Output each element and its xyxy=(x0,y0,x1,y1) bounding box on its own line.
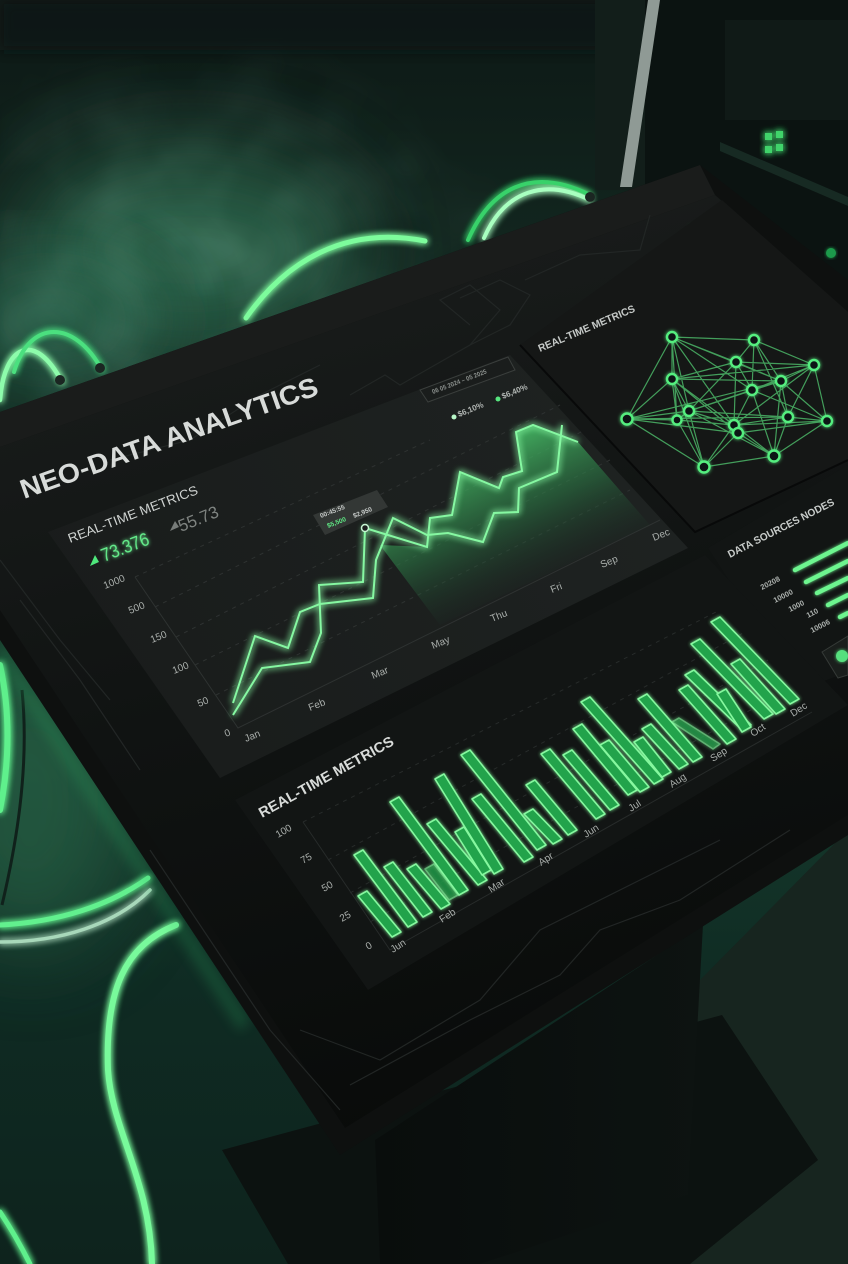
circuit traces xyxy=(0,215,790,1110)
x axis labels: Apr xyxy=(537,850,556,869)
bar labels: 10006 xyxy=(809,617,831,635)
server rack, top right xyxy=(595,0,848,300)
y axis labels: 75 xyxy=(299,851,315,867)
bar chart title: REAL-TIME METRICS xyxy=(256,734,397,821)
chart grid xyxy=(135,405,660,728)
tooltip: 00:45:55 xyxy=(319,504,346,520)
network title: REAL-TIME METRICS xyxy=(536,303,637,355)
line chart title: REAL-TIME METRICS xyxy=(66,482,200,546)
x axis labels xyxy=(243,527,672,745)
metric: 55.73: 55.73 xyxy=(175,502,221,536)
neon cables xyxy=(0,182,590,1264)
device body xyxy=(0,165,848,1155)
status widget xyxy=(822,636,848,678)
y axis labels: 0 xyxy=(223,727,233,740)
status light xyxy=(826,248,836,258)
metric: 73.376: 73.376 xyxy=(98,529,152,566)
cable: top right pair xyxy=(468,182,590,240)
data sources title: DATA SOURCES NODES xyxy=(726,496,837,561)
bar labels: 10000 xyxy=(772,587,794,605)
x axis labels: Sep xyxy=(709,745,730,765)
x axis labels xyxy=(389,701,810,956)
y axis labels: 100 xyxy=(171,660,191,677)
main title: NEO-DATA ANALYTICS xyxy=(16,372,322,505)
x axis labels: Mar xyxy=(370,665,391,682)
cable connectors xyxy=(55,192,595,385)
side bevel highlight xyxy=(0,165,715,447)
power icon xyxy=(690,224,706,241)
y axis labels: 100 xyxy=(274,823,294,841)
chart legend: $6,10% xyxy=(456,400,485,419)
x axis labels: Dec xyxy=(789,701,810,720)
tooltip xyxy=(313,490,388,535)
tooltip: $5,500 xyxy=(326,516,348,530)
panel: network graph xyxy=(520,200,848,532)
date range dropdown: 06 05 2024 – 05 2025 xyxy=(431,368,488,396)
cable: lower loop xyxy=(108,925,176,1264)
x axis labels: Aug xyxy=(668,772,689,791)
horizontal bars xyxy=(795,543,848,617)
area fill xyxy=(380,425,650,625)
x axis labels: Feb xyxy=(438,907,458,926)
rim glow xyxy=(0,640,250,1032)
y axis labels xyxy=(102,573,233,740)
chart legend: $6,40% xyxy=(500,382,529,401)
x axis labels: Oct xyxy=(749,722,768,740)
x axis labels: Sep xyxy=(599,554,620,571)
data point marker xyxy=(362,524,368,532)
x axis labels: Jun xyxy=(582,823,601,841)
bars xyxy=(354,617,799,937)
x axis labels: Dec xyxy=(651,527,672,544)
bar labels: 20208 xyxy=(759,574,781,592)
panel: data sources xyxy=(708,465,848,690)
cable: lower left pair xyxy=(0,878,150,942)
tooltip: $2,950 xyxy=(352,506,374,520)
x axis labels: Jun xyxy=(389,938,408,956)
line series xyxy=(233,425,578,715)
network edges xyxy=(627,337,827,467)
y axis labels: 50 xyxy=(320,879,336,895)
y axis labels: 1000 xyxy=(102,573,127,592)
rack indicator light xyxy=(765,131,783,153)
x axis labels: Jan xyxy=(243,729,262,745)
x axis labels: May xyxy=(430,635,452,652)
date range dropdown xyxy=(420,357,515,402)
network nodes xyxy=(622,332,832,472)
stand: base plate and column xyxy=(222,925,818,1264)
y axis labels: 0 xyxy=(364,940,375,953)
y axis labels xyxy=(274,823,375,953)
cable: left edge xyxy=(0,665,8,810)
bar labels: 1000 xyxy=(787,598,806,614)
cable: top left loop xyxy=(0,332,102,400)
x axis labels: Jul xyxy=(627,798,643,815)
y axis labels: 150 xyxy=(149,629,169,646)
floor xyxy=(420,830,848,1264)
bar labels: 110 xyxy=(805,606,820,620)
x axis labels: Feb xyxy=(307,697,328,714)
chart legend xyxy=(452,382,529,420)
y axis labels: 500 xyxy=(127,600,147,617)
x axis labels: Fri xyxy=(549,581,564,596)
y axis labels: 25 xyxy=(338,909,354,925)
bar labels xyxy=(759,574,831,635)
cable: top centre xyxy=(246,237,425,318)
y axis labels: 50 xyxy=(196,695,211,710)
cable: bottom left corner xyxy=(0,1212,30,1264)
panel: line chart xyxy=(48,355,688,778)
panel: bar chart xyxy=(235,555,848,990)
tablet dashboard device xyxy=(0,165,848,1155)
bar chart grid xyxy=(303,610,812,950)
device face xyxy=(0,195,848,1128)
x axis labels: Thu xyxy=(489,608,509,625)
x axis labels: Mar xyxy=(487,877,508,896)
